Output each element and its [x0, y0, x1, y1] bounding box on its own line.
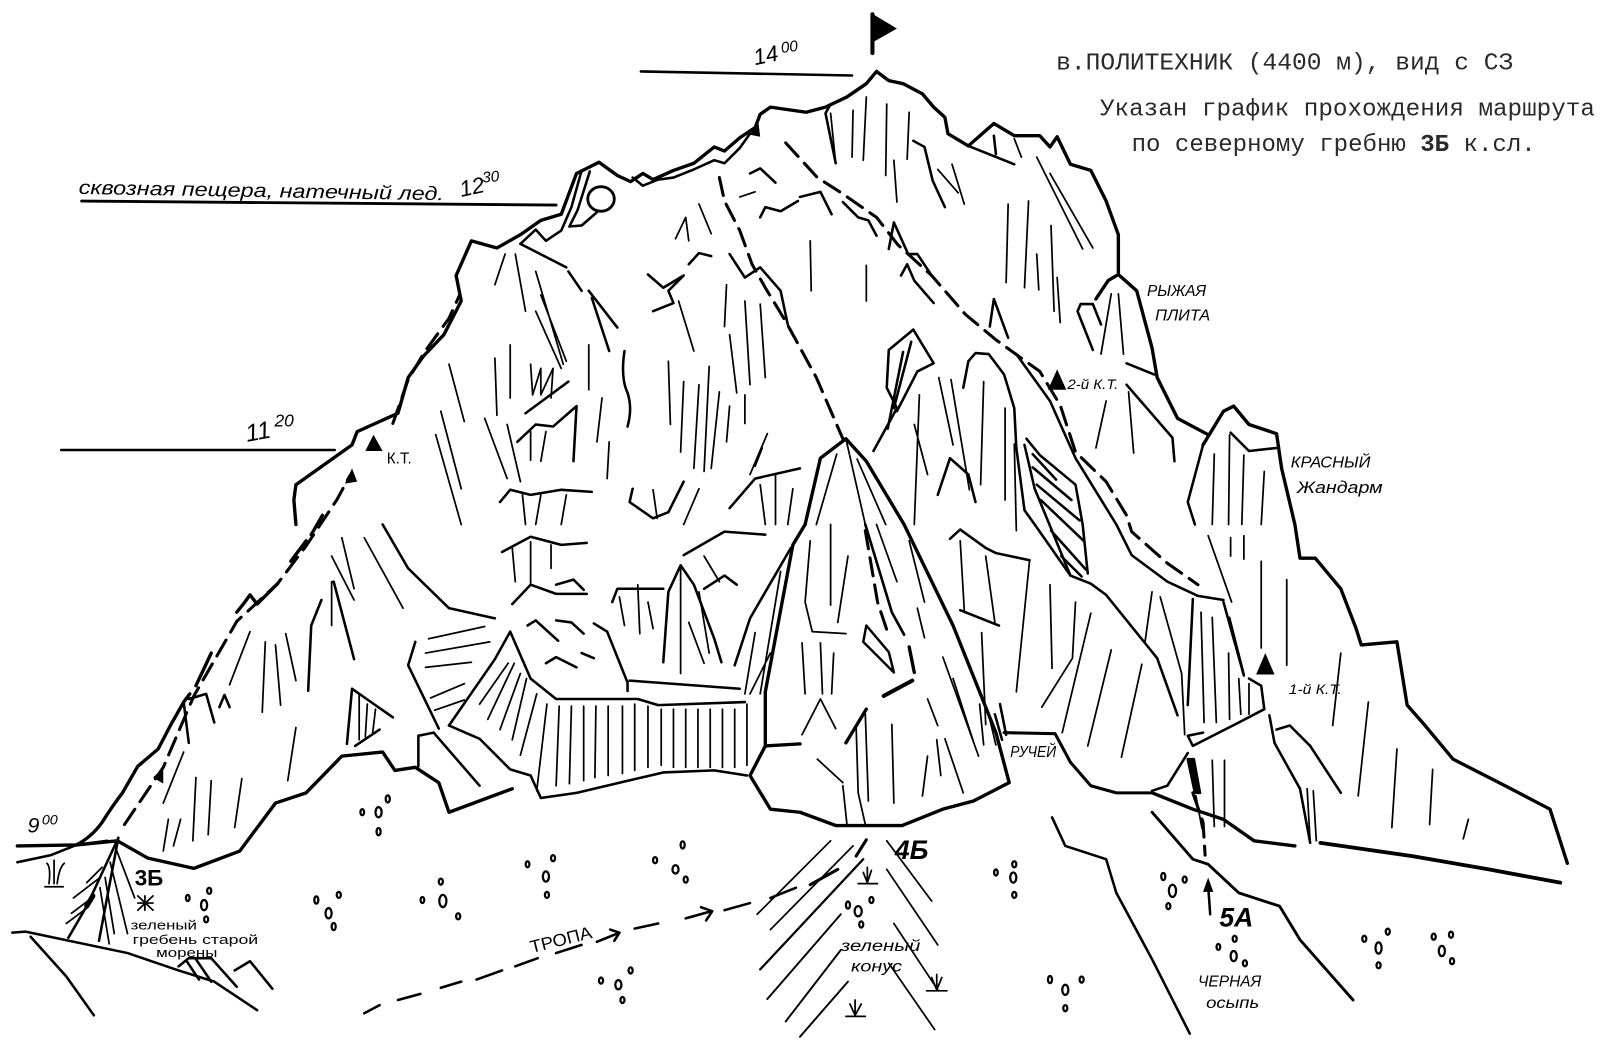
trail dashes with arrows [364, 888, 796, 1013]
time marker: cave 12:30: 12 [457, 172, 487, 202]
title: в.ПОЛИТЕХНИК (4400 м), вид с СЗ [1056, 50, 1513, 77]
label: зеленый конус [839, 938, 921, 975]
cone hatching [802, 439, 996, 824]
cone thick accents [810, 840, 866, 885]
route grades [135, 835, 1253, 933]
time marker 11:20: 20 [273, 411, 294, 431]
label: зеленый гребень старой морены [131, 918, 258, 960]
route grades: 5А [1219, 903, 1253, 933]
time marker 9:00 [28, 812, 58, 838]
label: Красный жандарм [1291, 453, 1383, 497]
label: зеленый конус: конус [851, 958, 902, 975]
label: Рыжая плита [1147, 283, 1210, 324]
label: Рыжая плита: РЫЖАЯ [1147, 283, 1207, 300]
label: ручей: РУЧЕЙ [1010, 743, 1056, 761]
icon: summit flag [871, 13, 897, 53]
scree lines [1052, 812, 1353, 1034]
route grades: 4Б [894, 835, 928, 865]
icon: control point 2-й К.Т. [1048, 369, 1118, 393]
dark hatched gullies [888, 342, 1200, 793]
route arrows [153, 120, 760, 784]
fishbone hatching 3B [66, 847, 135, 944]
time marker: cave 12:30 [78, 168, 556, 205]
label: черная осыпь: осыпь [1206, 995, 1259, 1012]
central cone buttress [750, 439, 1009, 826]
summit ridge route zigzag [633, 134, 750, 186]
icon: control point 2-й К.Т.: 2-й К.Т. [1066, 377, 1118, 393]
icons: grass tufts [45, 860, 947, 1016]
wall hatching [163, 97, 1468, 851]
route on north ridge, 3B [124, 143, 1205, 855]
time marker 11:20 [61, 411, 335, 450]
route grades: 3Б [135, 866, 163, 891]
icon: through cave [588, 187, 614, 211]
arrow: 5A route [1203, 878, 1213, 914]
time marker: cave 12:30: сквозная пещера, натечный лед. [78, 177, 444, 205]
label: Рыжая плита: ПЛИТА [1155, 307, 1210, 324]
upper massif ridge lines [184, 104, 1341, 843]
label: Красный жандарм: Жандарм [1296, 479, 1383, 497]
label: зеленый гребень старой морены: гребень старой [133, 932, 258, 947]
lower-left moraine ridge [12, 838, 272, 1015]
title [1056, 50, 1595, 159]
label: зеленый гребень старой морены: морены [156, 945, 217, 960]
time marker 9:00: 9 [28, 814, 40, 838]
icon: control point К.Т.: К.Т. [387, 450, 412, 467]
green cone fan lines [757, 841, 938, 1037]
time marker 14:00: 00 [780, 38, 800, 57]
label: зеленый гребень старой морены: зеленый [131, 918, 197, 933]
time marker: cave 12:30: 30 [482, 168, 500, 187]
label: Красный жандарм: КРАСНЫЙ [1291, 453, 1370, 471]
label: черная осыпь [1198, 974, 1262, 1012]
icon: control point 1-й К.Т. [1256, 653, 1342, 698]
time marker 9:00: 00 [42, 812, 58, 828]
boulders scattered on scree [186, 795, 1454, 1011]
time marker 14:00: 14 [751, 41, 781, 70]
icon: control point 1-й К.Т.: 1-й К.Т. [1289, 682, 1342, 698]
label: зеленый конус: зеленый [839, 938, 921, 955]
time marker 14:00 [641, 38, 852, 76]
time marker 11:20: 11 [243, 417, 273, 448]
label: черная осыпь: ЧЕРНАЯ [1198, 974, 1262, 991]
icon: control point К.Т. [365, 435, 412, 467]
label: тропа: ТРОПА [528, 922, 594, 957]
title: по северному гребню 3Б к.сл. [1132, 132, 1536, 159]
title: Указан график прохождения маршрута [1100, 96, 1595, 123]
mountain silhouette outline [17, 71, 1567, 883]
